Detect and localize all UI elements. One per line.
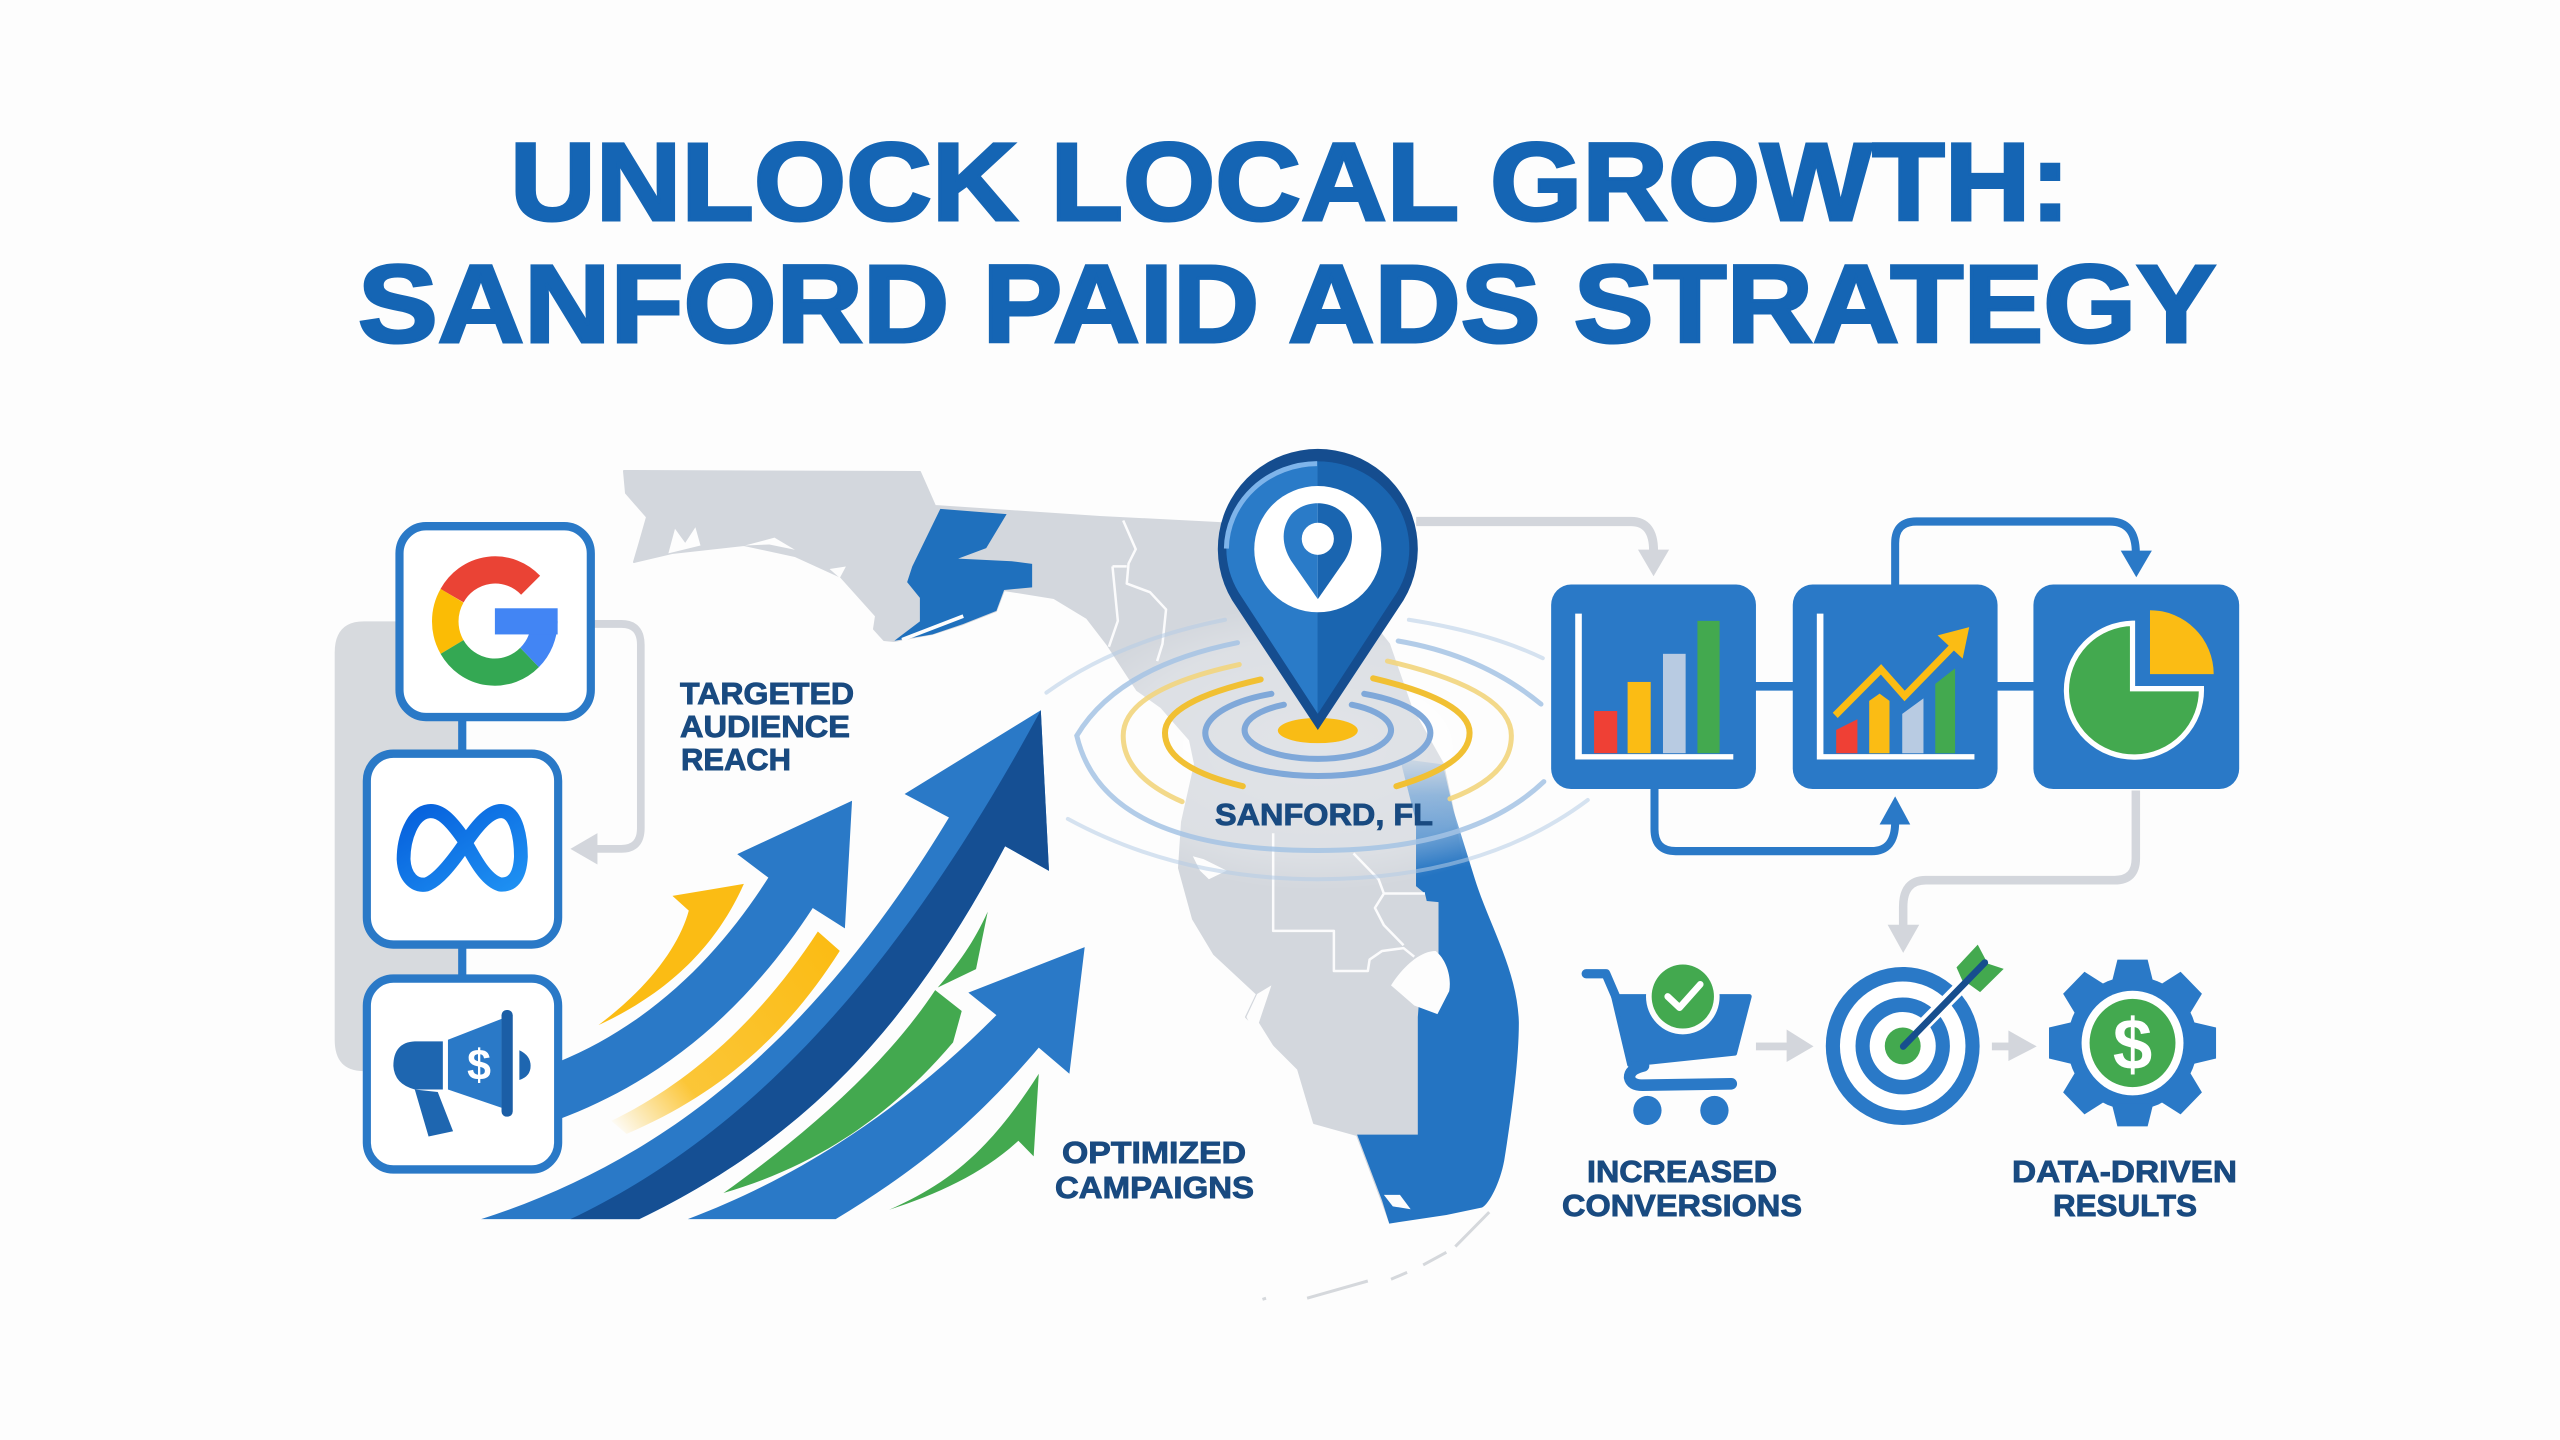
arrow: large blue xyxy=(481,710,1049,1219)
arrow: green xyxy=(723,912,988,1193)
icon: Meta infinity xyxy=(404,811,521,885)
map of Florida xyxy=(624,471,1575,1299)
Megaphone tile xyxy=(367,979,558,1169)
icon: megaphone xyxy=(393,1010,531,1137)
label: targeted audience reach: AUDIENCE xyxy=(680,709,850,744)
Meta tile xyxy=(367,754,558,945)
label: Sanford, FL: SANFORD, FL xyxy=(1215,797,1433,832)
map: panhandle details xyxy=(668,509,1032,641)
arrow: blue from megaphone xyxy=(558,801,852,1120)
icon: megaphone: $ xyxy=(467,1042,491,1090)
location rings around Sanford xyxy=(1046,620,1588,879)
pin: white circle xyxy=(1254,486,1381,612)
location pin xyxy=(1218,449,1418,730)
label: targeted audience reach: REACH xyxy=(681,742,791,777)
map: southeast blue region xyxy=(1061,520,1575,1299)
blue connectors between tiles xyxy=(1754,682,2037,691)
blue arrow: bottom loop xyxy=(1654,786,1910,851)
gray backing panel xyxy=(335,621,462,1071)
map: blue panhandle county xyxy=(894,509,1032,641)
map: keys xyxy=(1262,1212,1489,1299)
label: optimized campaigns: OPTIMIZED xyxy=(1062,1135,1246,1170)
gray arrow: charts to target xyxy=(1888,791,2136,953)
arrow: yellow stripe xyxy=(611,931,840,1134)
label: optimized campaigns: CAMPAIGNS xyxy=(1055,1170,1254,1205)
pin: inner marker xyxy=(1284,503,1318,599)
title xyxy=(358,121,2216,366)
gray arrow: pin to charts xyxy=(1416,522,1669,576)
blue connectors between boxes xyxy=(458,718,466,977)
icon: target with arrow xyxy=(1826,945,2004,1125)
label: targeted audience reach xyxy=(680,676,854,777)
yellow center spot xyxy=(1278,718,1358,743)
label: optimized campaigns xyxy=(1055,1135,1254,1205)
tile: pie chart xyxy=(2033,585,2239,789)
icon: Google G xyxy=(445,570,558,672)
tile: bar chart xyxy=(1551,585,1756,789)
blue arrow: top loop xyxy=(1895,522,2152,587)
rings veil xyxy=(1061,604,1575,891)
gray arrow: cart to target xyxy=(1756,1029,1814,1062)
map: inlets and lake xyxy=(1193,856,1450,1209)
title: UNLOCK LOCAL GROWTH: xyxy=(510,121,2070,244)
gray arrow: target to gear xyxy=(1992,1030,2037,1061)
label: data-driven results xyxy=(2012,1154,2237,1223)
arrow: small yellow xyxy=(598,884,744,1025)
label: increased conversions: INCREASED xyxy=(1587,1154,1777,1189)
label: data-driven results: RESULTS xyxy=(2053,1188,2197,1223)
icon: gear with dollar: $ xyxy=(2113,1004,2152,1085)
label: increased conversions xyxy=(1562,1154,1802,1223)
gray connector arrow: Google to Meta xyxy=(570,624,641,865)
label: targeted audience reach: TARGETED xyxy=(680,676,854,711)
Google tile xyxy=(399,526,591,717)
left column and growth arrows xyxy=(335,526,1085,1219)
arrow: small green xyxy=(889,1074,1039,1210)
arrow: lower blue xyxy=(688,947,1085,1219)
map: gray state outline xyxy=(624,471,1508,1220)
tile: trend chart xyxy=(1793,585,1998,789)
label: data-driven results: DATA-DRIVEN xyxy=(2012,1154,2237,1189)
analytics flow xyxy=(1416,522,2239,1126)
title: SANFORD PAID ADS STRATEGY xyxy=(358,243,2216,366)
label: increased conversions: CONVERSIONS xyxy=(1562,1188,1802,1223)
icon: shopping cart xyxy=(1586,959,1749,1125)
icon: gear with dollar xyxy=(2049,960,2216,1126)
